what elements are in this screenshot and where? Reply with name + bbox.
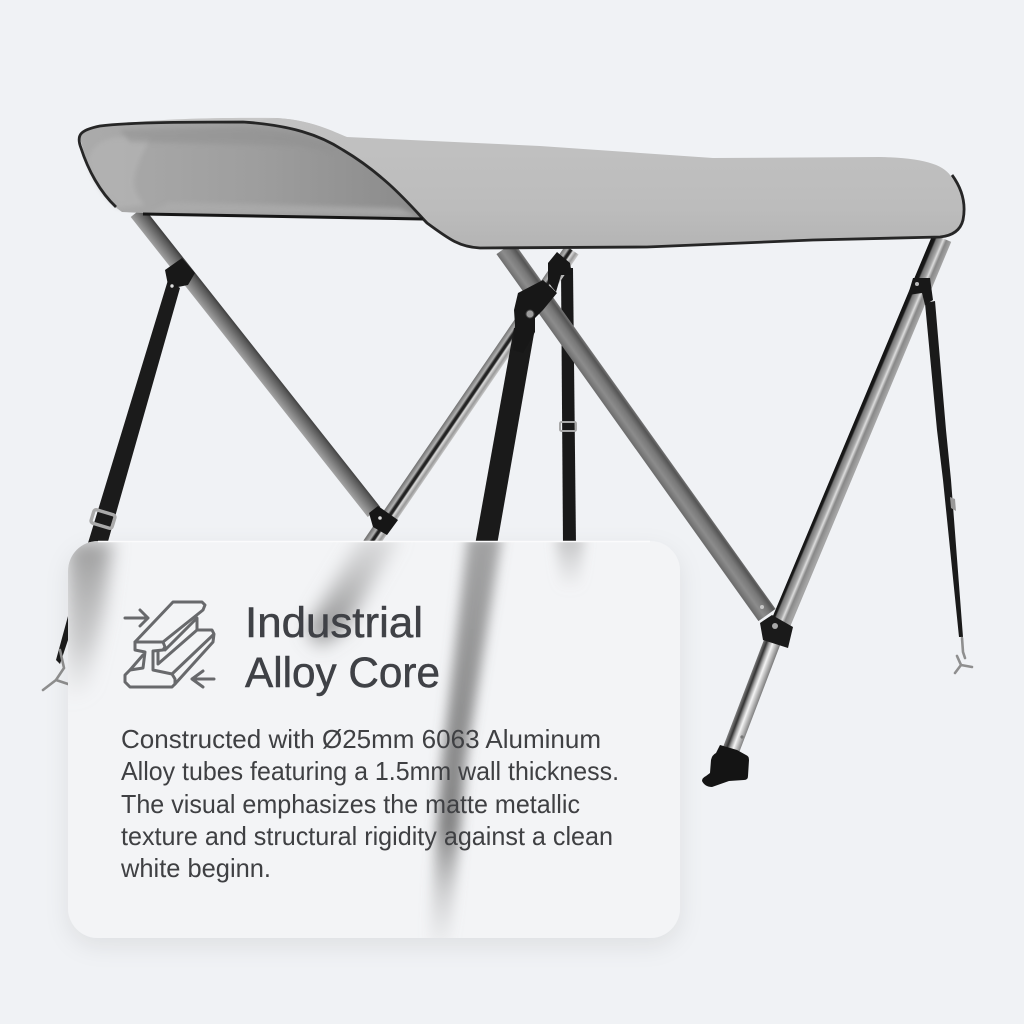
body text: white beginn.	[120, 853, 271, 883]
frosted shadows of frame behind card	[66, 535, 584, 950]
info card	[66, 535, 680, 950]
body text	[120, 724, 619, 883]
joint: centre bracket	[513, 252, 572, 353]
card surface	[68, 541, 680, 938]
canopy	[79, 118, 964, 248]
canopy lower seam	[143, 214, 423, 219]
body text: Constructed with Ø25mm 6063 Aluminum	[121, 724, 601, 754]
hook: right strap	[955, 638, 972, 673]
canopy lip, upper edge	[92, 118, 347, 139]
infographic	[42, 118, 974, 948]
tube: large grey centre arm	[505, 248, 767, 615]
canopy binding, black edge	[79, 122, 964, 248]
heading: Industrial	[245, 600, 423, 647]
body text: texture and structural rigidity against a clean	[121, 821, 613, 851]
hook: left strap	[43, 650, 68, 690]
card top highlight	[98, 540, 650, 542]
strap: right	[925, 301, 963, 637]
body text: The visual emphasizes the matte metallic	[121, 789, 580, 819]
heading: Alloy Core	[245, 650, 440, 697]
joint: right bracket	[908, 278, 933, 305]
foot mount	[702, 745, 749, 787]
strap: left	[56, 280, 180, 664]
canopy underside highlight folds	[88, 127, 420, 217]
joint: lower right	[760, 605, 793, 648]
tube: left grey rear arm	[137, 212, 374, 512]
icon: steel rail with compression arrows	[125, 602, 214, 687]
strap: centre wide	[475, 328, 535, 545]
product: bimini top frame and canopy	[43, 118, 972, 787]
canopy underside	[80, 122, 427, 220]
joint: lower centre	[369, 506, 398, 535]
canopy top surface	[243, 118, 964, 248]
tube: right front upper leg	[780, 238, 942, 625]
strap: rear centre	[560, 268, 576, 545]
tube: thin chrome rear leg	[370, 250, 572, 545]
heading	[245, 600, 440, 697]
body text: Alloy tubes featuring a 1.5mm wall thickness.	[121, 756, 619, 786]
joint: left arm strap bracket	[165, 258, 195, 288]
tube: right front lower chrome leg	[731, 640, 773, 750]
